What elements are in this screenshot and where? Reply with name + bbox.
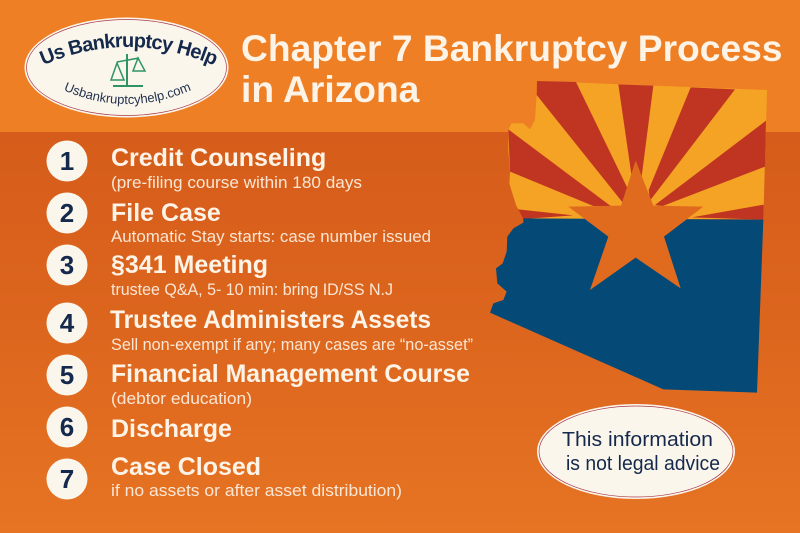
icon: scales of justice [111, 54, 145, 86]
step 3: 3 [60, 250, 74, 280]
step 2: File Case [111, 199, 221, 227]
step 5 [46, 354, 470, 408]
step 1: 1 [60, 146, 74, 176]
logo title: Us Bankruptcy Help [39, 34, 216, 66]
step 3: §341 Meeting [111, 251, 268, 279]
map: blue lower region [490, 218, 763, 393]
step 7 [46, 453, 402, 500]
step 7: Case Closed [111, 453, 261, 481]
step 1 [46, 140, 362, 192]
callout: legal disclaimer: This information [562, 428, 713, 451]
map: star [568, 161, 703, 290]
step 6 [46, 406, 232, 448]
step 2: 2 [60, 198, 74, 228]
step 7: if no assets or after asset distribution) [111, 482, 402, 500]
step 6: Discharge [111, 415, 232, 443]
map: yellow upper region [508, 81, 767, 219]
step 3 [46, 244, 393, 299]
step 4: Trustee Administers Assets [110, 306, 431, 334]
step 6: 6 [60, 412, 74, 442]
step 1: Credit Counseling [111, 144, 326, 172]
header band [0, 0, 800, 132]
callout: legal disclaimer: is not legal advice [566, 452, 720, 475]
step 4: 4 [60, 308, 75, 338]
lower background [0, 132, 800, 533]
step 2 [46, 192, 431, 246]
step 4 [46, 302, 473, 354]
step 1: (pre-filing course within 180 days [111, 174, 362, 192]
step 7: 7 [60, 464, 74, 494]
logo url: Usbankruptcyhelp.com [65, 82, 191, 106]
step 4: Sell non-exempt if any; many cases are “no-asset” [111, 336, 473, 354]
step 5: (debtor education) [111, 390, 252, 408]
title: Chapter 7 Bankruptcy Process [241, 27, 782, 69]
step 3: trustee Q&A, 5- 10 min: bring ID/SS N.J [111, 281, 393, 299]
step 5: 5 [60, 360, 74, 390]
step 5: Financial Management Course [111, 360, 470, 388]
callout: legal disclaimer [537, 404, 735, 499]
title: in Arizona [241, 68, 420, 110]
logo badge [24, 18, 228, 118]
map: Arizona flag [490, 81, 767, 393]
map: red rays [508, 81, 766, 220]
step 2: Automatic Stay starts: case number issued [111, 228, 431, 246]
